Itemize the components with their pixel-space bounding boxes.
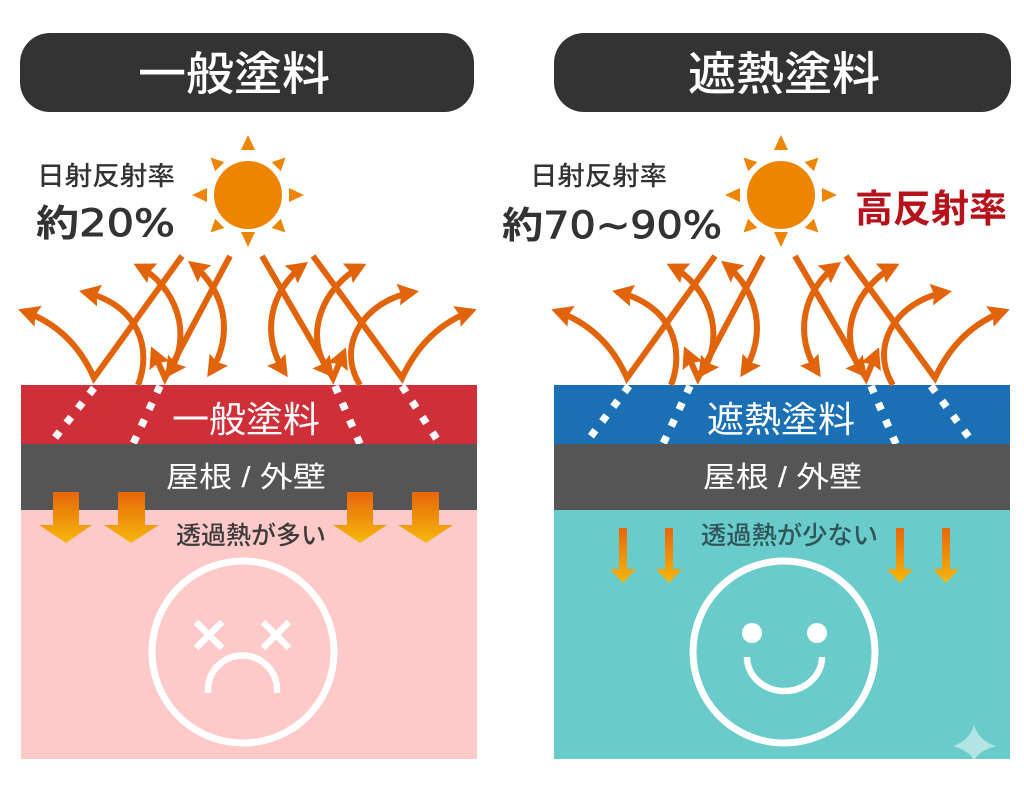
teal interior <box>554 510 1010 759</box>
label: high reflectance: 高反射率 <box>855 189 1007 231</box>
red paint layer: 一般塗料 <box>172 399 320 440</box>
icon: happy face <box>693 561 875 743</box>
blue paint layer <box>554 385 1010 444</box>
heading: general paint: 一般塗料 <box>138 48 330 100</box>
label: solar reflectance: 日射反射率 <box>530 161 667 191</box>
label: solar reflectance: 日射反射率 <box>37 161 175 191</box>
label: much transmitted heat: 透過熱が多い <box>176 522 326 550</box>
roof and wall layer <box>554 444 1010 510</box>
label: little transmitted heat: 透過熱が少ない <box>701 522 878 550</box>
heading: general paint <box>20 33 474 112</box>
heading: heat shield paint: 遮熱塗料 <box>688 48 880 100</box>
pink interior <box>21 510 477 759</box>
roof and wall layer <box>21 444 477 510</box>
arrows: reflected sunlight <box>556 256 1005 385</box>
arrows: heavy heat transmission <box>39 492 453 543</box>
panel: heat shield paint <box>502 33 1011 759</box>
roof and wall layer: 屋根 / 外壁 <box>703 461 862 494</box>
icon: sun <box>725 135 837 247</box>
icon: sun <box>192 135 304 247</box>
heading: heat shield paint <box>554 33 1011 112</box>
blue paint layer: 遮熱塗料 <box>707 399 855 440</box>
icon: sparkle <box>953 725 996 759</box>
value: about 70 to 90 percent: 約70~90% <box>502 204 722 247</box>
roof and wall layer: 屋根 / 外壁 <box>166 461 326 494</box>
arrows: light heat transmission <box>610 528 959 583</box>
arrows: reflected sunlight <box>23 256 472 385</box>
value: about 20 percent: 約20% <box>36 202 175 245</box>
panel: general paint <box>20 33 477 759</box>
red paint layer <box>21 385 477 444</box>
icon: sad face <box>152 561 334 743</box>
